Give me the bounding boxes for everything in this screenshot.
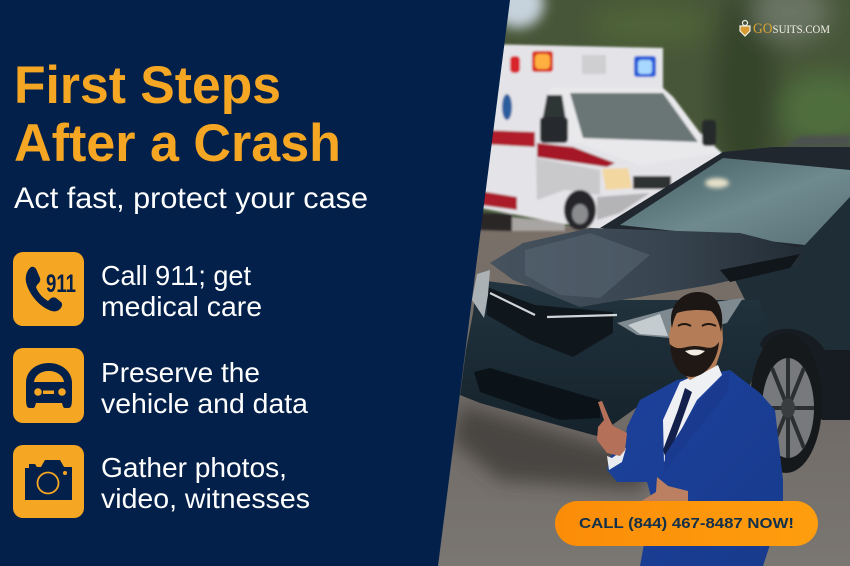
- step 3: [13, 445, 310, 518]
- logo: GoSuits.com: GOSUITS.COM: [753, 21, 830, 37]
- tie: [663, 388, 692, 462]
- panel: navy sidebar: [0, 0, 510, 566]
- heading: title: First Steps: [14, 56, 281, 115]
- step 1: [13, 252, 262, 326]
- lower vent: [474, 368, 600, 420]
- eyes and brows: [678, 324, 716, 326]
- ground shadow: [452, 405, 660, 490]
- roof and windshield: [600, 147, 850, 250]
- step text: [101, 260, 262, 322]
- neck and head: [669, 296, 723, 380]
- wheel: [750, 329, 850, 473]
- heading: title: After a Crash: [14, 114, 341, 173]
- grille: [487, 287, 613, 357]
- smile: [685, 350, 705, 356]
- hand pointing: [597, 401, 627, 456]
- lower hand: [640, 477, 688, 502]
- subtitle: Act fast, protect your case: [14, 182, 368, 215]
- icon: phone 911: [13, 252, 84, 326]
- icon: camera: [13, 445, 84, 518]
- heading: title: [14, 56, 341, 173]
- shirt: [663, 365, 722, 462]
- ambulance: [478, 44, 722, 232]
- hair: [671, 292, 722, 332]
- suit: [607, 370, 783, 566]
- beard: [670, 342, 719, 377]
- step text: Gather photos,: [101, 452, 287, 483]
- distant car: [785, 135, 850, 147]
- attorney: [597, 292, 783, 566]
- road: [430, 226, 850, 566]
- call to action button: CALL (844) 467-8487 NOW!: [579, 515, 794, 532]
- step text: Preserve the: [101, 357, 260, 388]
- headlights: [472, 270, 490, 318]
- step text: medical care: [101, 291, 262, 322]
- blurred trees: [420, 0, 850, 240]
- bumper: [460, 280, 770, 436]
- step text: vehicle and data: [101, 388, 309, 419]
- photo: crash scene: [420, 0, 850, 566]
- step text: video, witnesses: [101, 483, 310, 514]
- sky: [492, 0, 544, 28]
- call to action button: [555, 501, 818, 546]
- hood: [490, 228, 806, 307]
- crashed car: [452, 147, 850, 490]
- body side: [730, 197, 850, 420]
- step text: Call 911; get: [101, 260, 251, 291]
- icon: phone 911: 911: [46, 270, 76, 298]
- icon: car: [13, 348, 84, 423]
- step text: [101, 452, 310, 514]
- step 2: [13, 348, 309, 423]
- lock icon: [740, 20, 750, 36]
- lapel: [664, 370, 730, 472]
- shirt cuff: [607, 448, 626, 470]
- step text: [101, 357, 309, 419]
